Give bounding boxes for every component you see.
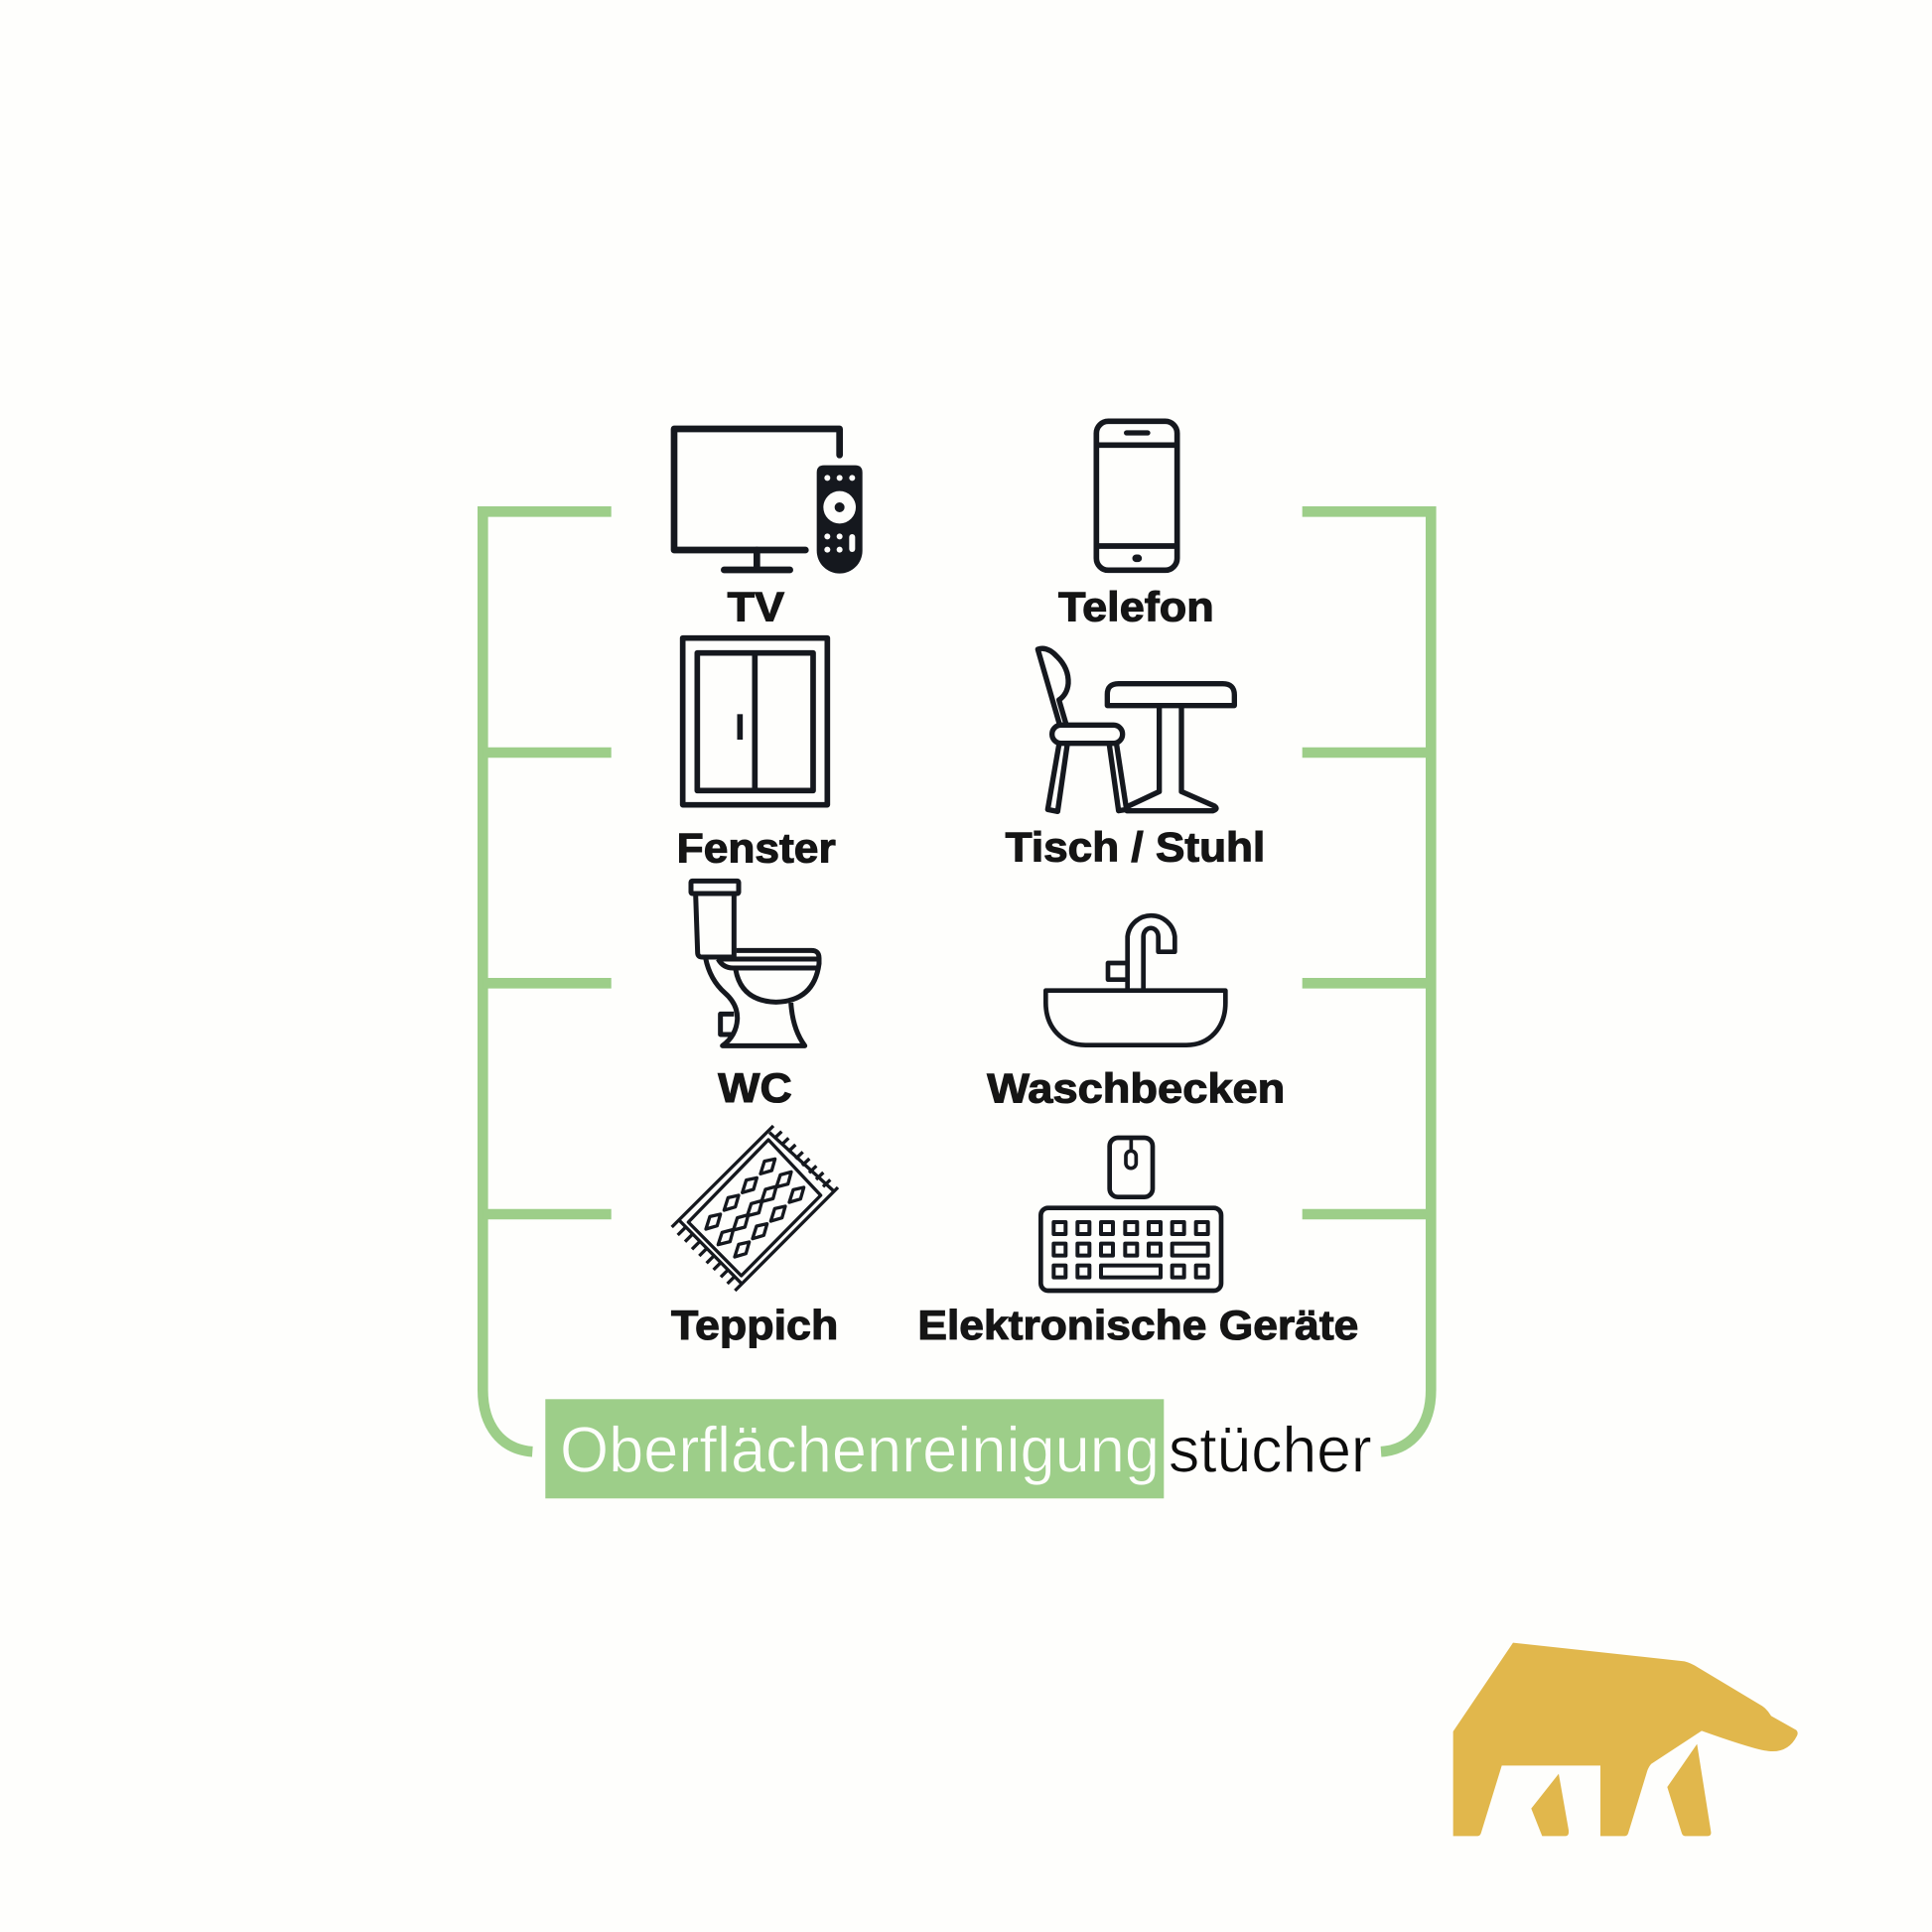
label: Elektronische Geräte: Elektronische Geräte [917,1302,1358,1348]
logo: polar bear [1453,1643,1798,1836]
item: Fenster [677,638,836,871]
item: TV [674,429,863,630]
item: Teppich [671,1126,838,1348]
icon: toilet [691,881,819,1045]
icon: sink with faucet [1045,915,1225,1045]
label: WC: WC [718,1064,792,1111]
left bracket [483,511,612,1451]
icon: tv with remote [674,429,863,574]
heading: Oberflächenreinigungstücher [545,1399,1372,1498]
item: Telefon [1058,421,1214,630]
item: WC [691,881,819,1111]
icon: rug with fringe [672,1126,838,1291]
label: Waschbecken: Waschbecken [987,1065,1285,1112]
icon: window [683,638,827,805]
label: Telefon: Telefon [1058,584,1214,630]
heading text: dark part: stücher [1169,1414,1372,1486]
icon: chair and table [1037,648,1234,811]
label: Fenster: Fenster [677,824,836,871]
icon: smartphone [1096,421,1177,570]
right bracket [1303,511,1431,1451]
item: Waschbecken [987,915,1285,1112]
heading text: highlighted part: Oberflächenreinigung [560,1414,1160,1486]
label: Teppich: Teppich [671,1302,838,1348]
label: Tisch / Stuhl: Tisch / Stuhl [1006,824,1265,871]
icon: mouse and keyboard [1040,1138,1221,1291]
label: TV: TV [728,584,784,630]
highlight box [545,1399,1164,1498]
item: Tisch / Stuhl [1006,648,1265,871]
item: Elektronische Geräte [917,1138,1358,1348]
